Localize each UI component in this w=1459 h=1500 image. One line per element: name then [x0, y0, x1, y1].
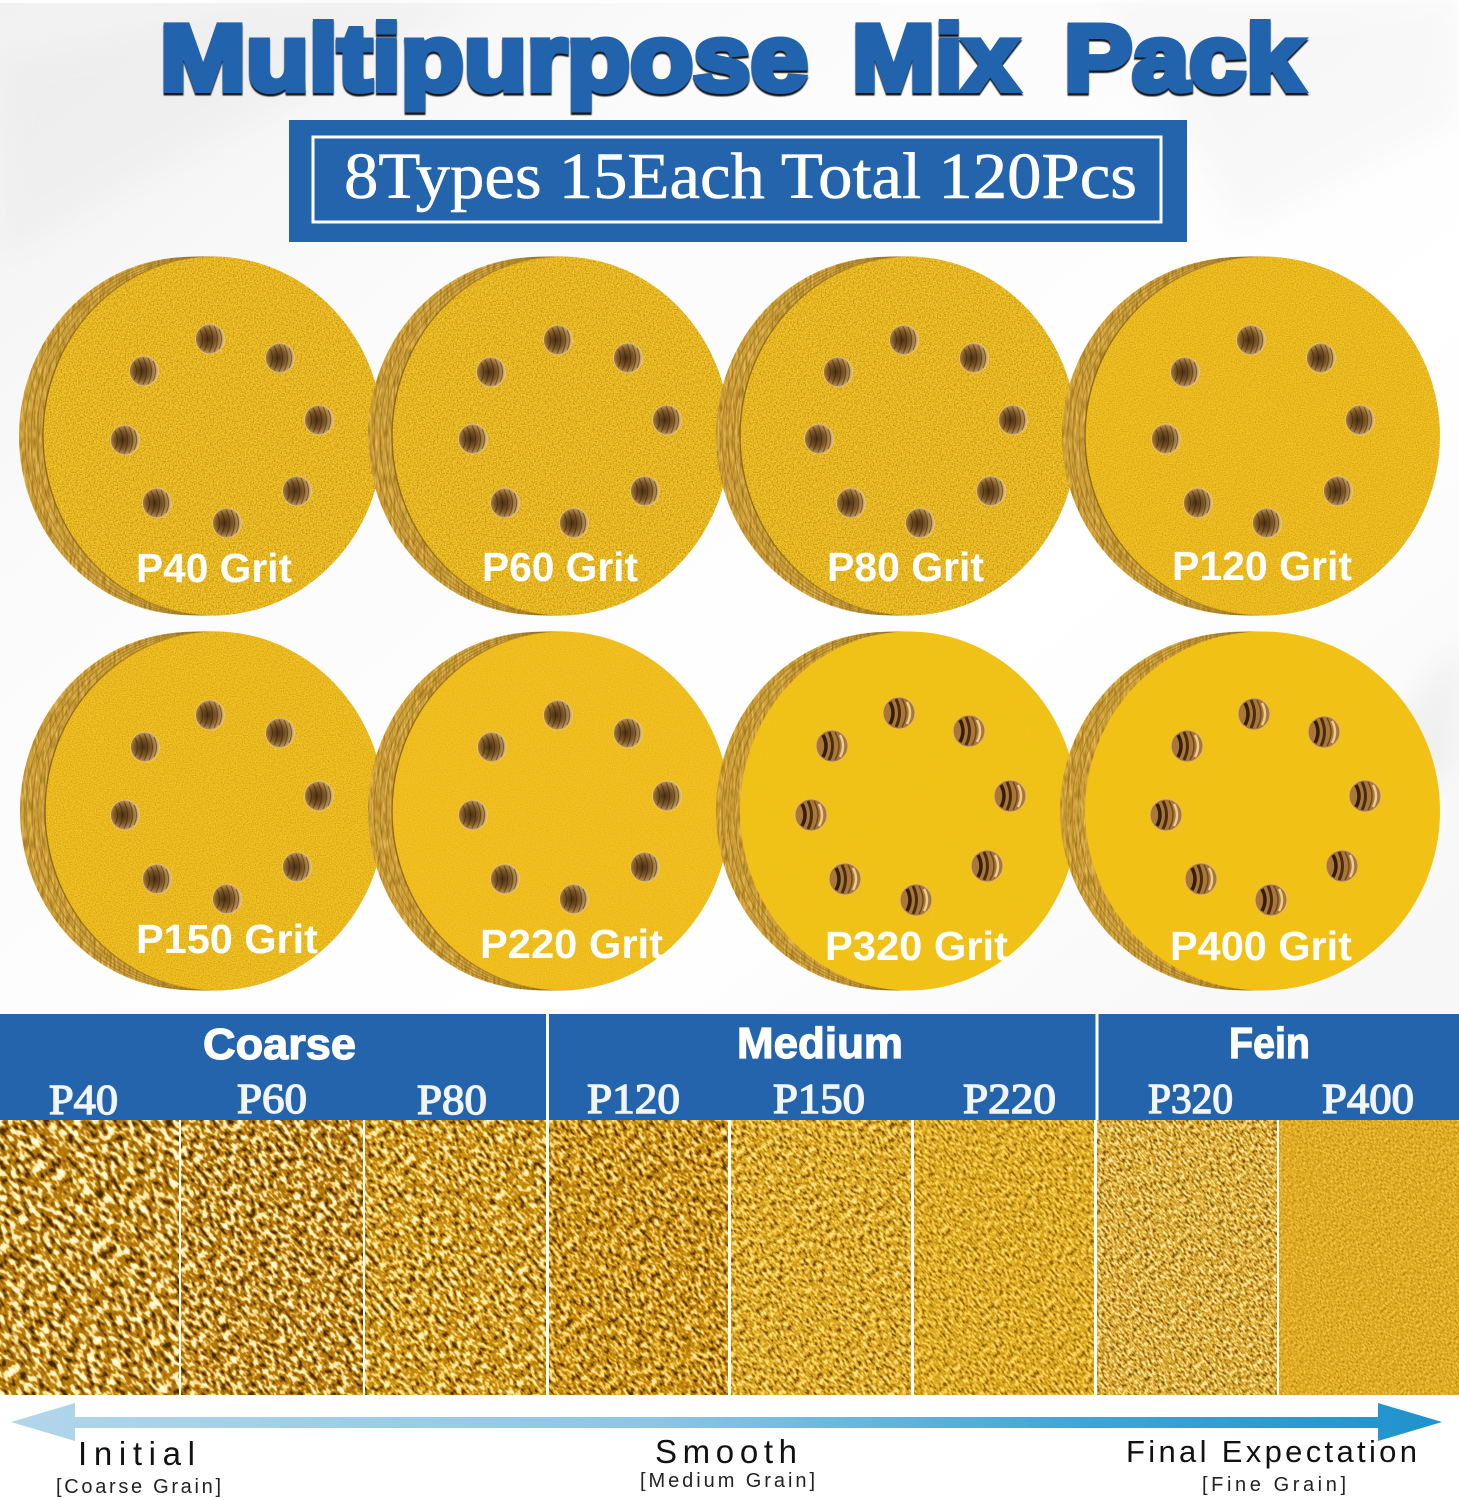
disc P80: [716, 256, 1077, 616]
grit codes: P150: [773, 1077, 865, 1123]
holes P60: [458, 325, 682, 538]
grit codes: P400: [1322, 1077, 1414, 1123]
header band: grit categories: [0, 1014, 1459, 1124]
disc P150: [20, 632, 385, 990]
caption detail: coarse grain: [Coarse Grain]: [56, 1476, 221, 1498]
disc P400: [1060, 632, 1440, 990]
grit codes: [49, 1077, 1414, 1124]
arrow: coarse to fine progression: [11, 1403, 1442, 1441]
grit codes: P320: [1148, 1077, 1233, 1123]
holes P150: [110, 700, 334, 914]
caption: final expectation: [1126, 1434, 1417, 1496]
holes P40: [110, 324, 334, 538]
grit codes: P120: [587, 1077, 680, 1123]
category: Fein: Fein: [1229, 1019, 1310, 1068]
holes P400: [1150, 698, 1381, 916]
disc P320: [716, 632, 1078, 990]
disc P60: [368, 256, 730, 616]
banner: pack quantity: [289, 120, 1187, 242]
caption: smooth: [640, 1433, 815, 1492]
caption: initial: [56, 1435, 221, 1498]
label P220: P220 Grit: [480, 921, 663, 967]
label P400: P400 Grit: [1170, 923, 1352, 969]
category: Medium: Medium: [737, 1019, 903, 1068]
grit codes: P80: [417, 1078, 487, 1124]
grit texture swatches: [0, 1120, 1459, 1395]
label P320: P320 Grit: [825, 923, 1008, 969]
disc P220: [368, 632, 730, 990]
holes P320: [795, 697, 1026, 916]
caption detail: medium grain: [Medium Grain]: [640, 1470, 815, 1492]
category: Coarse: Coarse: [203, 1020, 356, 1069]
label P40: P40 Grit: [136, 545, 292, 591]
holes P120: [1152, 325, 1374, 538]
grit codes: P60: [237, 1077, 307, 1123]
caption: initial: Initial: [78, 1435, 195, 1472]
banner text: 8Types 15Each Total 120Pcs: [344, 140, 1137, 213]
label P150: P150 Grit: [136, 916, 318, 962]
caption: smooth: Smooth: [655, 1433, 797, 1470]
label P80: P80 Grit: [827, 544, 984, 590]
disc P120: [1062, 256, 1440, 616]
holes P80: [804, 325, 1028, 538]
holes P220: [458, 700, 682, 914]
caption: final expectation: Final Expectation: [1126, 1434, 1417, 1469]
title: Pack: [1064, 5, 1304, 110]
caption detail: fine grain: [Fine Grain]: [1202, 1474, 1346, 1496]
label P60: P60 Grit: [482, 544, 638, 590]
label P120: P120 Grit: [1172, 543, 1352, 589]
title: [160, 5, 1304, 110]
title: Multipurpose: [160, 5, 808, 110]
grit codes: P220: [963, 1077, 1056, 1123]
title: Mix: [852, 5, 1018, 110]
disc P40: [19, 256, 383, 616]
grit codes: P40: [49, 1078, 118, 1124]
